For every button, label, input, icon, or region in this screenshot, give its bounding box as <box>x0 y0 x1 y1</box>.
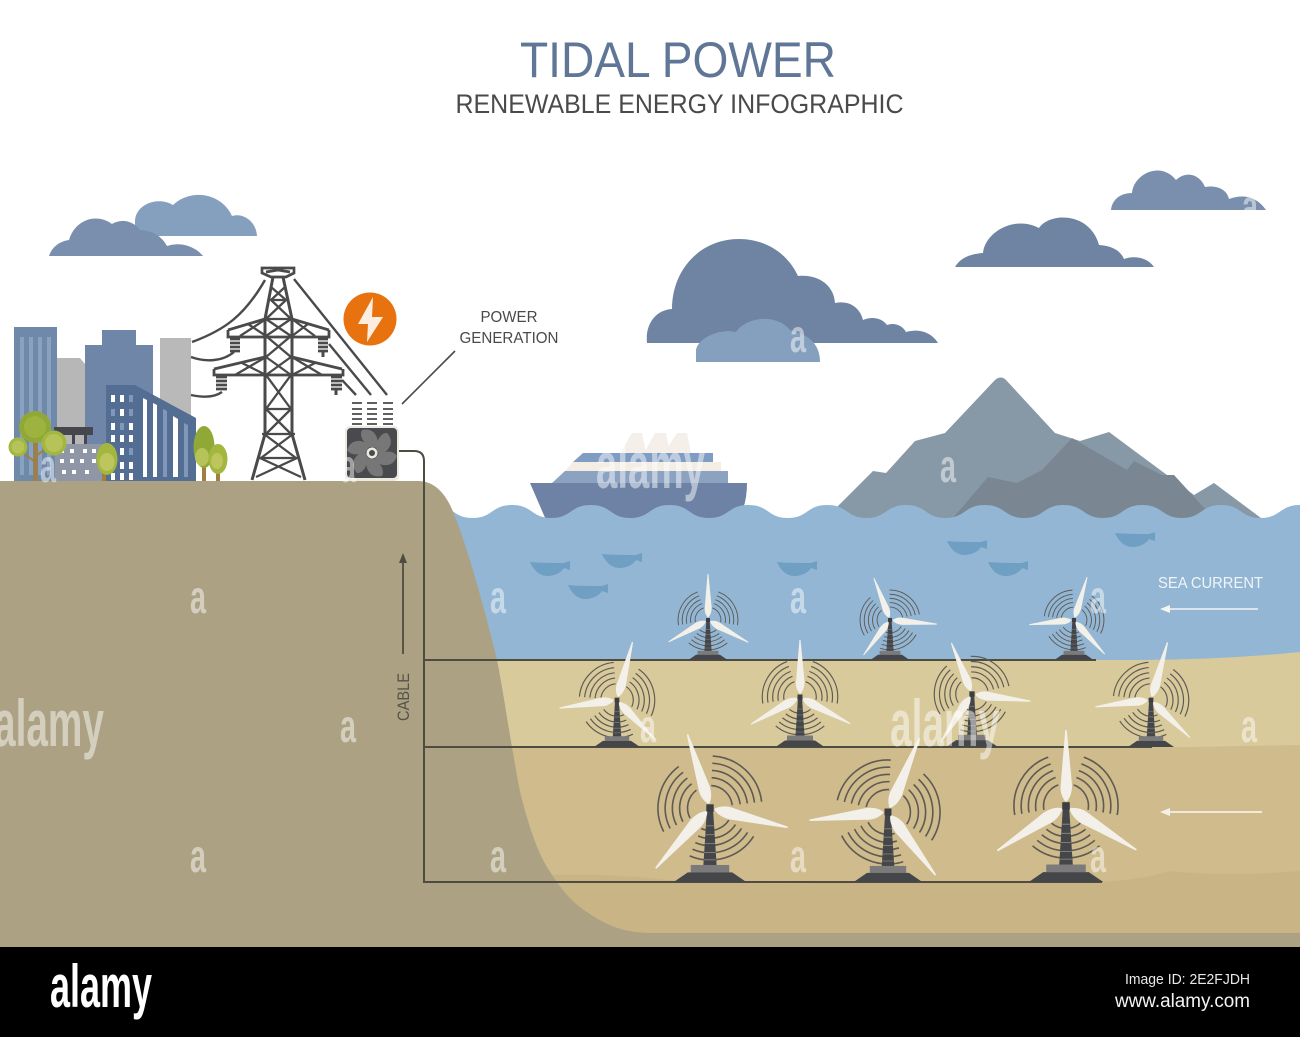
watermark: a <box>340 700 356 752</box>
icon: lightning bolt <box>344 292 396 346</box>
seabed layers <box>480 652 1300 940</box>
footer bar: Image ID: 2E2FJDH <box>1125 971 1250 988</box>
generator box with coils <box>345 403 399 481</box>
watermark: a <box>190 571 206 623</box>
watermark: a <box>790 310 806 362</box>
city skyline <box>14 327 196 481</box>
power generation label: POWER <box>480 309 538 326</box>
watermark: a <box>940 440 956 492</box>
watermark: a <box>1090 571 1106 623</box>
watermark: a <box>490 571 506 623</box>
subtitle: RENEWABLE ENERGY INFOGRAPHIC <box>456 89 904 119</box>
watermark: a <box>1241 700 1257 752</box>
cloud top right <box>1111 170 1266 210</box>
footer bar <box>0 947 1300 1037</box>
power generation label: GENERATION <box>460 330 558 347</box>
clouds above the city <box>49 195 257 256</box>
mountains <box>834 378 1261 518</box>
power generation label <box>402 309 558 404</box>
watermark: a <box>1090 830 1106 882</box>
cliff ground <box>0 481 1300 947</box>
watermark: a <box>1242 180 1258 232</box>
large cloud pair <box>647 239 938 362</box>
fish <box>530 532 1155 599</box>
watermark: alamy <box>596 428 705 502</box>
title: TIDAL POWER <box>520 32 836 88</box>
lower current arrow <box>1160 808 1262 816</box>
watermark: a <box>490 830 506 882</box>
watermark: a <box>790 571 806 623</box>
watermark: alamy <box>890 686 1000 760</box>
watermark: a <box>40 440 56 492</box>
footer bar: www.alamy.com <box>1114 991 1250 1012</box>
watermark <box>0 180 1258 882</box>
watermark: a <box>790 830 806 882</box>
watermark: a <box>340 440 356 492</box>
cable label and arrow <box>395 553 413 721</box>
sea current label and arrow: SEA CURRENT <box>1158 575 1263 592</box>
cruise ship <box>530 433 747 520</box>
watermark: a <box>640 700 656 752</box>
sea water with waves <box>394 505 1300 680</box>
watermark: a <box>190 830 206 882</box>
cable network <box>399 451 1152 882</box>
power pylon <box>191 268 387 480</box>
turbines row 2 <box>559 640 1205 749</box>
cable label and arrow: CABLE <box>395 673 413 721</box>
turbines row 3 <box>635 730 1140 884</box>
trees <box>8 411 228 481</box>
sea current label and arrow <box>1158 575 1263 613</box>
footer bar: alamy <box>50 953 152 1020</box>
turbines row 1 <box>667 574 1117 661</box>
cloud middle right <box>955 218 1154 267</box>
